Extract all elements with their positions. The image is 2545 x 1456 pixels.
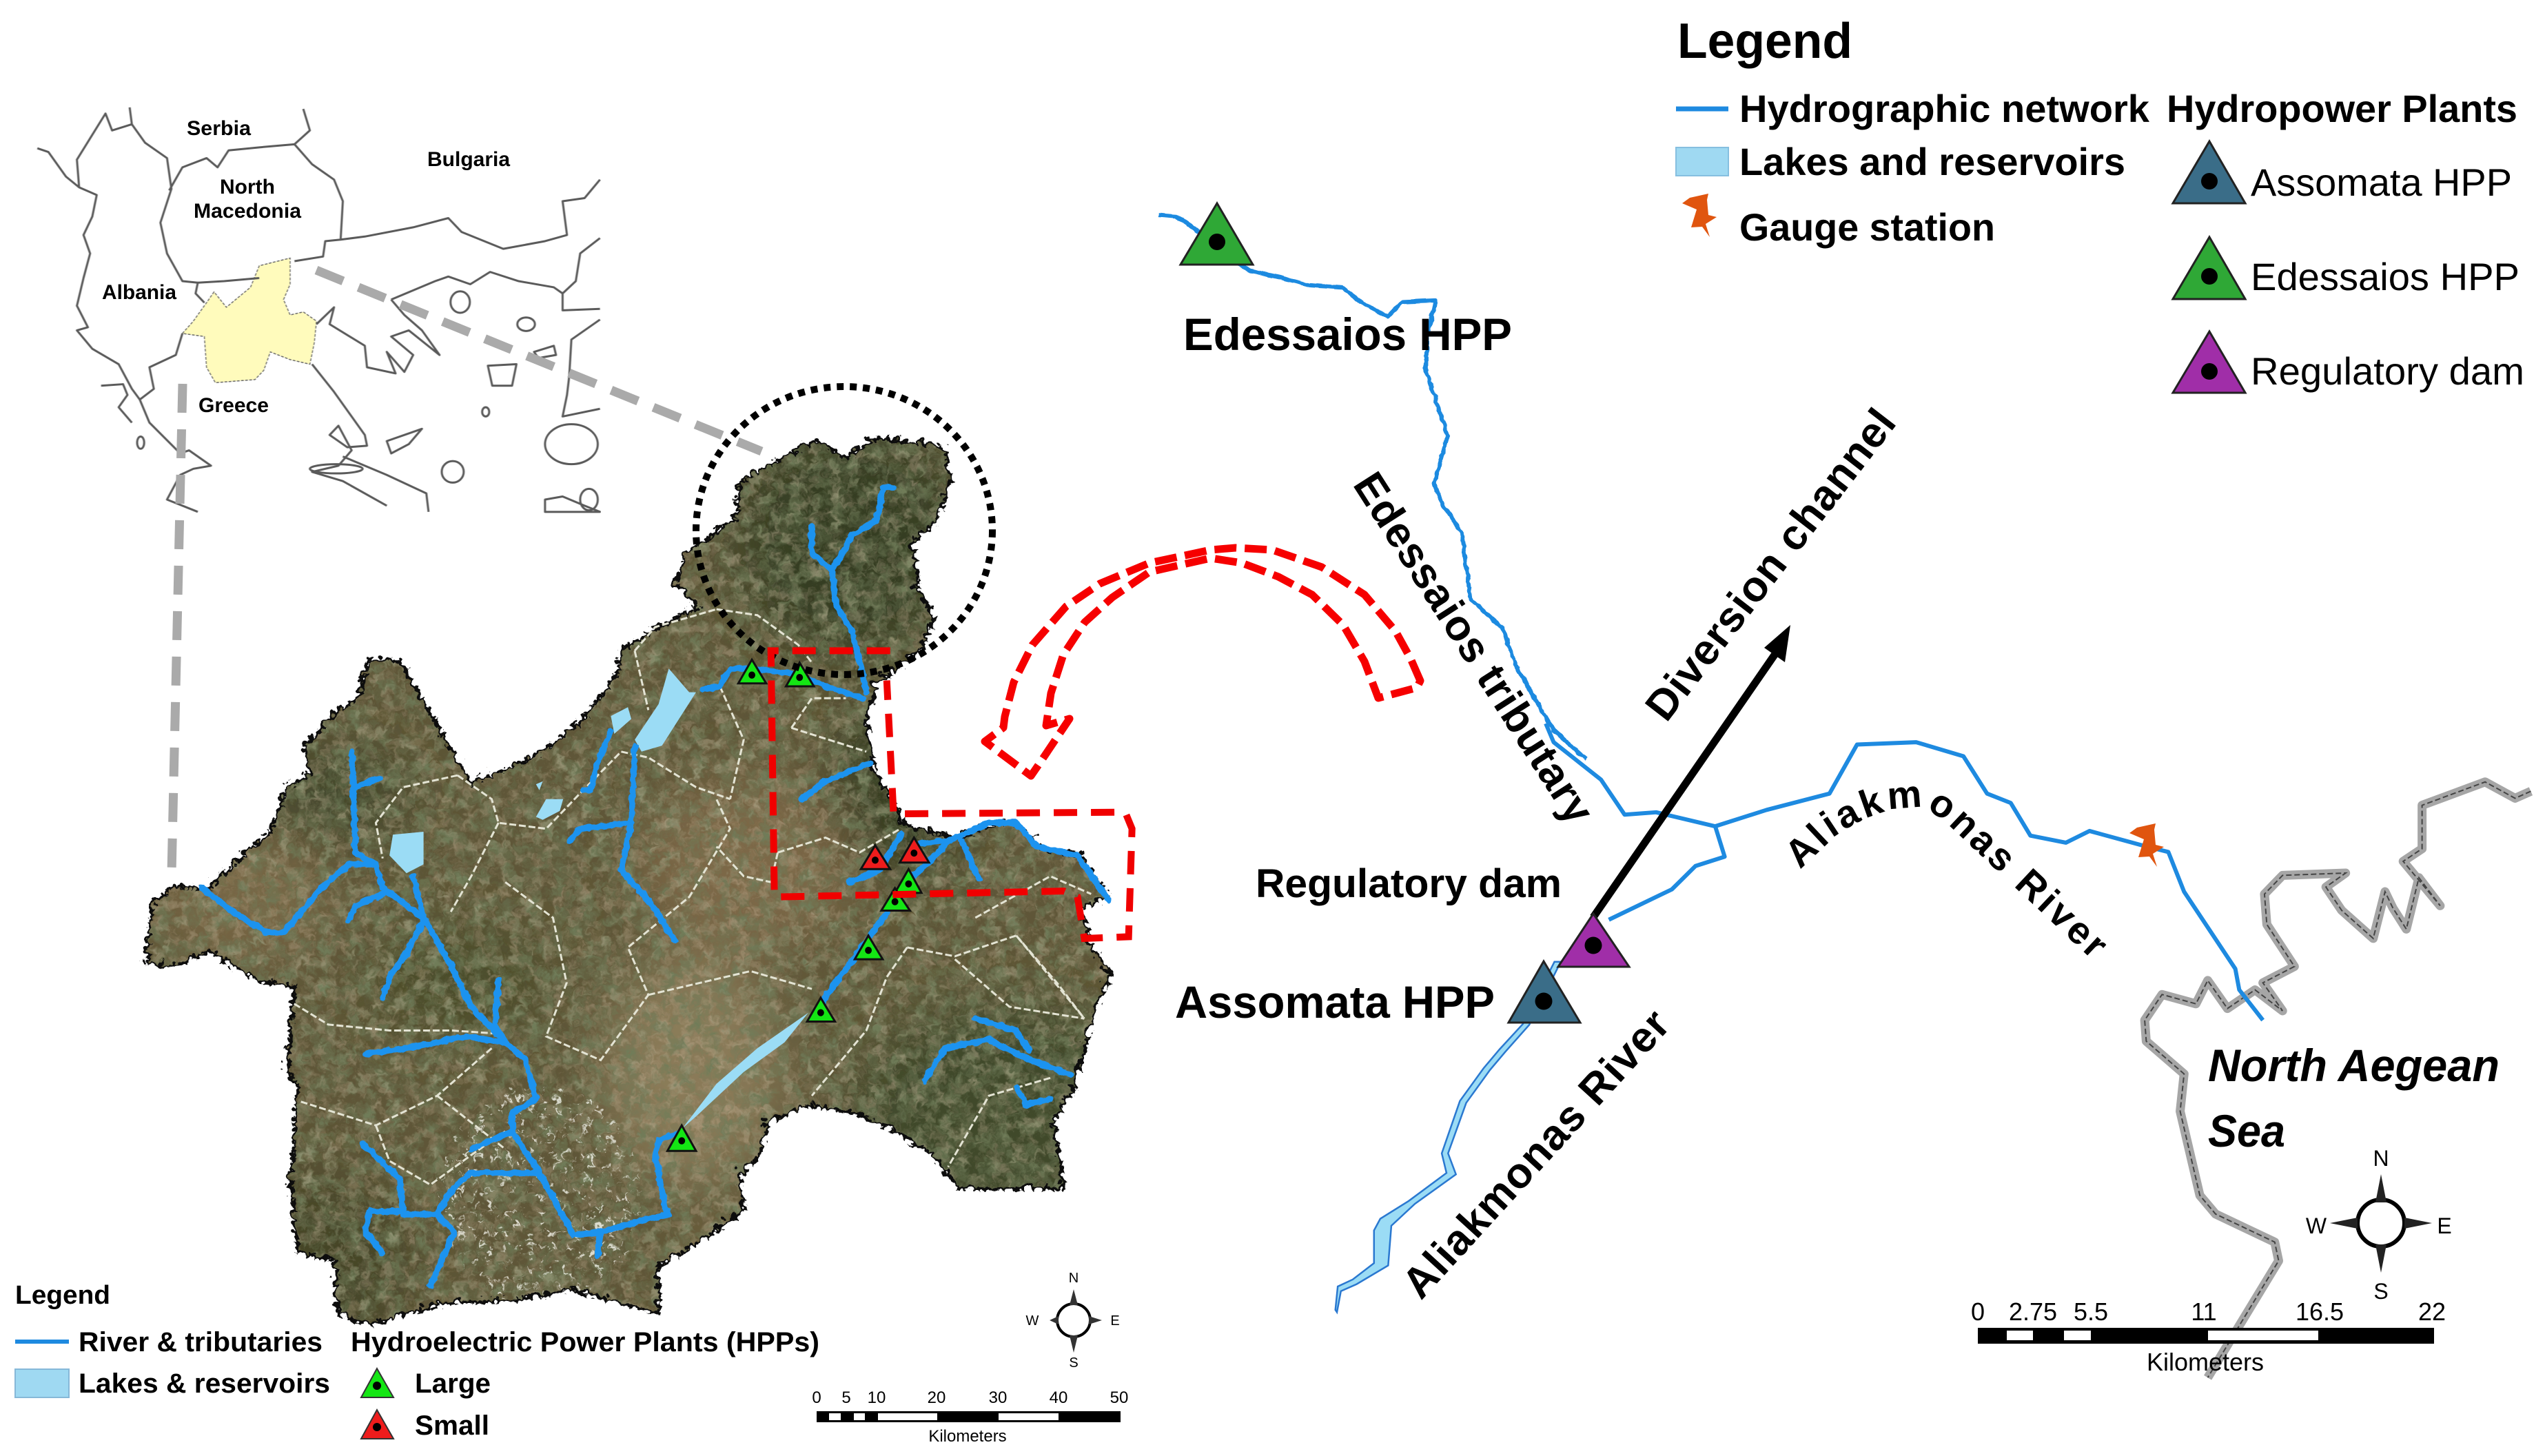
scale bar: detail map: 5.5 xyxy=(2074,1298,2108,1326)
scale bar: basin map: 30 xyxy=(989,1388,1007,1407)
legend: Regulatory dam: Regulatory dam xyxy=(2251,349,2524,393)
basin outline xyxy=(144,434,1108,1321)
icon: Edessaios HPP triangle xyxy=(1180,203,1253,265)
river network xyxy=(202,488,1108,1286)
legend: Regulatory dam xyxy=(2173,331,2524,393)
icon: gauge station pin on map xyxy=(2129,823,2164,867)
label: Aliakmonas River upper, curved xyxy=(1800,808,2116,982)
label: Edessaios HPP: Edessaios HPP xyxy=(1183,309,1512,360)
inset label: North Macedonia xyxy=(194,176,301,223)
legend: large HPP: Large xyxy=(415,1368,491,1399)
gray dashed zoom line to south xyxy=(172,384,183,873)
inset label: North Macedonia: North xyxy=(220,176,275,198)
label: North Aegean Sea xyxy=(2208,1040,2500,1156)
panel: detail map legend xyxy=(1676,14,2524,393)
legend heading: Hydropower Plants: Hydropower Plants xyxy=(2167,87,2517,130)
lower Aliakmonas reservoir xyxy=(1336,962,1561,1312)
compass: basin map: E xyxy=(1110,1313,1120,1329)
red dashed curved arrow xyxy=(985,548,1420,776)
legend: gauge station: Gauge station xyxy=(1739,205,1995,249)
scale bar: detail map: Kilometers xyxy=(2147,1348,2264,1376)
label: Edessaios tributary: Edessaios tributary xyxy=(1344,464,1603,832)
panel: detail network map: Aliakmonas River xyxy=(1789,786,2106,955)
inset: highlighted basin in yellow xyxy=(183,258,316,382)
legend: hydrographic network: Hydrographic network xyxy=(1739,87,2150,130)
scale bar: basin map xyxy=(812,1388,1128,1446)
scale bar: basin map: 50 xyxy=(1110,1388,1128,1407)
label: Assomata HPP: Assomata HPP xyxy=(1175,976,1495,1027)
scale bar: detail map: 2.75 xyxy=(2009,1298,2057,1326)
label: Aliakmonas River lower: Aliakmonas River xyxy=(1393,1001,1679,1307)
inset: country borders and coastlines xyxy=(37,107,600,512)
compass: basin map: S xyxy=(1069,1355,1079,1371)
legend: Assomata HPP xyxy=(2173,141,2512,204)
scale bar: basin map: 0 xyxy=(812,1388,821,1407)
compass: basin map: N xyxy=(1069,1271,1079,1286)
label: North Aegean Sea: Sea xyxy=(2208,1105,2285,1156)
inset label: Greece: Greece xyxy=(198,394,269,417)
sub-basin boundaries xyxy=(294,609,1091,1185)
scale bar: detail map: 11 xyxy=(2191,1298,2217,1326)
scale bar: basin map: 5 xyxy=(841,1388,851,1407)
legend: lakes and reservoirs: Lakes & reservoirs xyxy=(79,1368,330,1399)
red dashed study area outline xyxy=(771,650,1132,939)
lakes and reservoirs xyxy=(389,668,808,1129)
legend: lakes and reservoirs: Lakes and reservoirs xyxy=(1739,140,2125,183)
scale bar: basin map: 20 xyxy=(928,1388,946,1407)
legend: Edessaios HPP: Edessaios HPP xyxy=(2251,255,2520,298)
legend: small HPP xyxy=(361,1410,489,1441)
scale bar: basin map: 10 xyxy=(868,1388,886,1407)
icon: Assomata HPP triangle xyxy=(1509,961,1580,1023)
Edessaios tributary river xyxy=(1158,215,1586,759)
panel: detail network map xyxy=(1158,201,2533,1380)
legend: Assomata HPP: Assomata HPP xyxy=(2251,161,2512,204)
legend: Edessaios HPP xyxy=(2173,237,2520,299)
inset label: Albania: Albania xyxy=(102,281,176,304)
compass: detail map xyxy=(2306,1146,2452,1304)
inset label: Serbia: Serbia xyxy=(187,117,251,140)
Aliakmonas River course xyxy=(1336,724,2263,1312)
panel: locator inset map xyxy=(37,107,600,512)
diversion channel arrow xyxy=(1593,625,1790,917)
legend: large HPP xyxy=(361,1368,491,1399)
scale bar: detail map xyxy=(1971,1298,2446,1376)
scale bar: basin map: 40 xyxy=(1050,1388,1067,1407)
scale bar: basin map: Kilometers xyxy=(928,1427,1007,1446)
icons: hydropower plant triangles on basin map xyxy=(667,659,929,1151)
panel: basin map legend xyxy=(15,1281,819,1441)
label: North Aegean Sea: North Aegean xyxy=(2208,1040,2500,1091)
scale bar: detail map: 0 xyxy=(1971,1298,1985,1326)
legend: river and tributaries: River & tributaries xyxy=(79,1327,323,1357)
legend: small HPP: Small xyxy=(415,1411,489,1441)
compass: detail map: N xyxy=(2373,1146,2389,1171)
legend: gauge station xyxy=(1682,194,1995,249)
legend heading: Legend xyxy=(1677,14,1852,69)
compass: basin map: W xyxy=(1026,1313,1039,1329)
dotted circle around upper sub-basin xyxy=(696,387,992,675)
label: Diversion channel: Diversion channel xyxy=(1636,400,1905,730)
legend heading: Legend xyxy=(15,1281,110,1310)
scale bar: detail map: 16.5 xyxy=(2296,1298,2344,1326)
scale bar: detail map: 22 xyxy=(2418,1298,2446,1326)
compass: basin map xyxy=(1026,1271,1120,1371)
legend heading: HPPs: Hydroelectric Power Plants (HPPs) xyxy=(351,1327,819,1357)
compass: detail map: E xyxy=(2437,1213,2452,1238)
panel: satellite basin map xyxy=(139,434,1114,1329)
inset label: North Macedonia: Macedonia xyxy=(194,200,301,223)
label: Regulatory dam: Regulatory dam xyxy=(1256,861,1562,906)
basin satellite fill xyxy=(139,434,1114,1329)
inset label: Bulgaria: Bulgaria xyxy=(427,148,510,171)
coastline xyxy=(2145,782,2531,1377)
gray dashed zoom line to east xyxy=(316,270,762,451)
compass: detail map: S xyxy=(2373,1279,2389,1304)
icon: regulatory dam triangle xyxy=(1558,914,1629,967)
compass: detail map: W xyxy=(2306,1213,2327,1238)
